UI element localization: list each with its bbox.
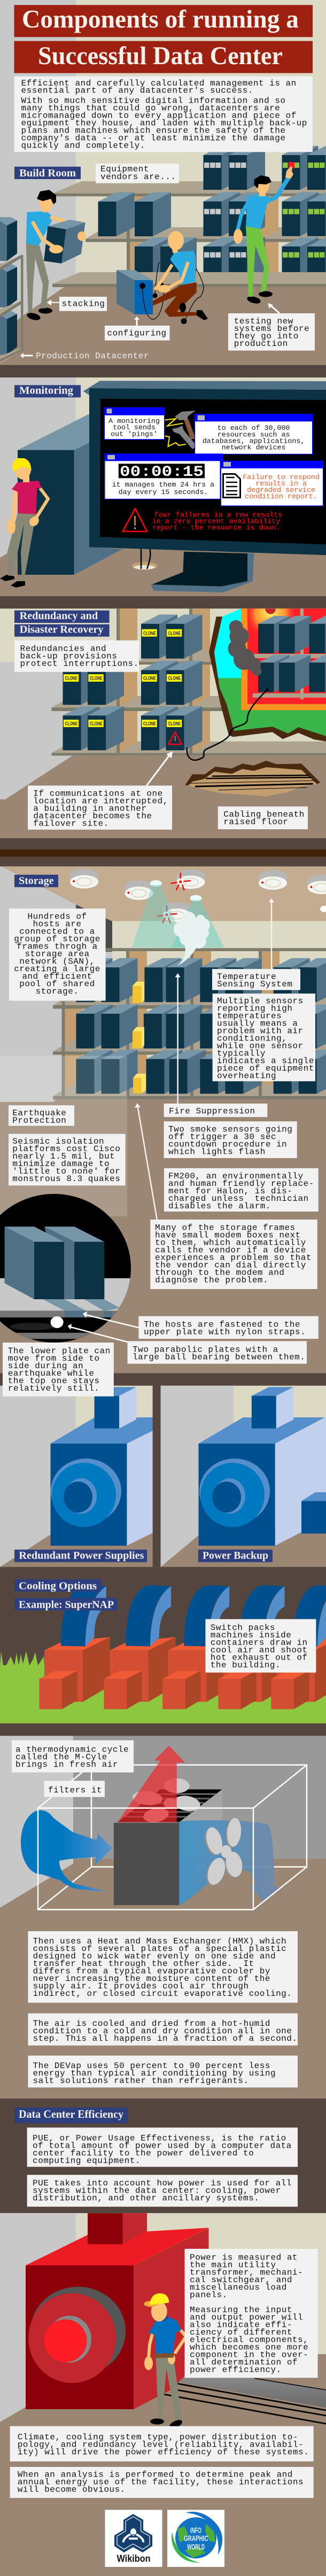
callout: modem boxes: have small modem boxes next [155,1231,301,1240]
text: redundancies: back-up provisions [20,651,117,661]
heading: data center efficiency: Data Center Efficiency [19,2108,123,2120]
text: smoke sensors [164,1121,297,1158]
text: hundreds of hosts: connected to a [19,927,95,936]
callout: nylon straps: upper plate with nylon straps. [144,1328,306,1337]
text: multiple sensors: problem with air [217,1027,304,1036]
text: smoke sensors: off trigger a 30 sec [168,1132,276,1142]
heading: example supernap: Example: SuperNAP [19,1599,114,1610]
callout: modem boxes: to them, which automatically [155,1238,306,1248]
text: power measured: transformer, mechani- [190,2268,303,2278]
text: redundancies: Redundancies and [20,644,106,653]
cable through wall [187,689,268,760]
text: lower plate: the top one stays [8,1376,100,1386]
exhaust arrow [118,1746,185,1822]
divider [153,1386,161,1567]
big server [18,413,123,575]
text: air cooled: The air is cooled and dried from a hot-humid [33,2019,270,2029]
window: failure report: degraded service [247,486,315,494]
window: monitoring tool: out 'pings' [111,430,158,438]
grass and ground [0,1651,326,1723]
heading: earthquake protection [9,1105,74,1126]
section background: build room [0,0,326,377]
text: multiple sensors: piece of equipment [217,1064,314,1074]
band [0,1723,326,1736]
clone labels: CLONE [168,721,181,727]
text: HMX [28,1931,298,2003]
text: air cooled: step. This all happens in a fraction of a second. [33,2034,297,2043]
floor: monitoring [0,547,326,596]
callout: configuring [105,317,170,341]
text: seismic isolation: platforms cost Cisco [12,1144,120,1154]
callout: parabolic plates: large ball bearing between them. [133,1352,305,1362]
text: PUE definition: PUE, or Power Usage Effectiveness, is the ratio [33,2133,286,2143]
callout: modem boxes: through to the modem and [155,1268,284,1278]
shelving: storage [53,948,326,1100]
text: hundreds of hosts: network (SAN), [19,957,95,966]
text: lower plate: earthquake while [8,1369,94,1378]
callout: fire suppression [164,973,267,1117]
callout: configuring: configuring [107,329,167,338]
text: multiple sensors: reporting high [217,1004,292,1014]
sprinklers and smoke cloud [132,880,326,966]
heading: cooling options: Cooling Options [19,1580,97,1592]
text: PUE definition [27,2127,298,2167]
text: seismic isolation [9,1134,125,1185]
heading: power backup: Power Backup [203,1550,268,1562]
clone labels: CLONE [65,721,77,727]
text: power measured: Power is measured at [190,2253,298,2263]
text: PUE scope: distribution, and other ancillary systems. [33,2193,259,2203]
warning [123,508,282,531]
section background: monitoring [0,377,326,597]
section background: redundancy [0,608,326,838]
text: DEVap: The DEVap uses 50 percent to 90 percent less [33,2061,270,2071]
intro text: micromanaged down to every application and piece of [21,111,297,121]
clone labels: CLONE [143,676,156,682]
callout: failover: datacenter becomes the [33,811,152,821]
text: climate: ity) will drive the power efficiency of these systems. [18,2448,309,2457]
panel: power backup [161,1386,326,1567]
text: hundreds of hosts: storage. [36,986,79,996]
callout: temperature sensing: Temperature [217,972,276,982]
text: FM200: FM200, an environmentally [168,1171,304,1181]
heading: redundancy: Redundancy and [20,610,98,622]
red generator [26,2213,208,2409]
text: analysis: will become obvious. [18,2485,126,2494]
text: hundreds of hosts: group of storage [14,934,100,944]
text: seismic isolation: minimize damage to [12,1159,110,1169]
window: timer [104,453,223,499]
text: lower plate: side during an [8,1361,83,1371]
text: FM200 [164,1168,319,1212]
logo: infographic world [167,2510,224,2567]
callout: thermodynamic cycle: a thermodynamic cycle [15,1745,129,1755]
shelving: redundancy [51,608,326,755]
window: resources: databases, applications, [203,437,305,445]
band [0,838,326,867]
text: analysis: When an analysis is performed to determine peak and [18,2470,293,2479]
text: HMX: differs from a typical evaporative cooler by [33,1966,270,1976]
text: lower plate: The lower plate can [8,1346,111,1356]
text: power measured: panels. [190,2290,228,2300]
callout: failover [28,751,173,830]
callout: parabolic plates: Two parabolic plates with a [133,1345,278,1354]
person: testing [234,166,293,305]
heading: monitoring: Monitoring [19,385,73,397]
intro text: equipment they house, and laden with multiple back-up [21,119,307,128]
person: configuring [117,231,208,324]
text: multiple sensors: temperatures [217,1012,282,1021]
floor: build room [0,287,326,365]
logo: infographic world: GRAPHIC [184,2534,208,2543]
title [14,5,313,73]
text: multiple sensors: overheating [217,1071,276,1081]
text: hundreds of hosts: pool of shared [19,979,95,989]
text: multiple sensors: conditioning, [217,1034,287,1044]
callout: failover: failover site. [33,819,109,828]
text: hundreds of hosts: hosts are [33,919,81,929]
heading: earthquake protection: Protection [12,1116,66,1125]
evaporative unit [114,1790,222,1905]
callout: testing: production [234,339,288,349]
text: PUE definition: center facility to the power delivered to [33,2148,254,2158]
window: failure report: Failure to respond [243,473,320,481]
text: multiple sensors: while one sensor [217,1042,304,1051]
callout: thermodynamic cycle: brings in fresh air [15,1760,118,1770]
callout: modem boxes: experiences a problem so that [155,1253,312,1263]
window: monitoring tool: A monitoring [108,417,160,425]
text: multiple sensors: usually means a [217,1019,298,1029]
text: switch packs: containers draw in [211,1638,308,1647]
production datacenter racks [0,217,24,364]
shelving: build room [52,146,326,287]
callout: modem boxes: diagnose the problem. [155,1276,268,1285]
text: power measured: ciency of different [190,2327,292,2337]
window: timer: day every 15 seconds. [119,488,208,496]
band [0,1373,326,1386]
window: failure report: condition report. [245,492,317,500]
text: power measured: cal switchgear, and [190,2276,292,2285]
window: resources: to each of 30,000 [218,424,290,432]
callout: testing: testing new [234,317,293,326]
text: PUE scope: systems within the data center: cooling, power [33,2186,281,2195]
person: engineer [144,2293,186,2430]
clone labels: CLONE [143,721,156,727]
text: PUE definition: computing equipment. [33,2156,141,2165]
text: redundancies [14,641,139,672]
text: power measured: component in the over- [190,2350,308,2359]
text: switch packs [205,1619,316,1672]
text: air cooled [28,2014,298,2046]
text: hundreds of hosts: and efficient [22,971,92,981]
wireframe front [38,1808,307,1910]
monitor stand [151,552,254,592]
intro text: plans and machines which ensure the safety of the [21,126,285,136]
warning: report - the resource is down. [152,524,280,531]
warning: four failures in a row results [154,511,282,519]
callout: modem boxes [135,1103,317,1289]
tools icon [164,411,197,449]
section background: efficiency [0,2099,326,2213]
intro text: Efficient and carefully calculated management is an [21,79,297,88]
text: seismic isolation: nearly 1.5 mil, but [12,1152,115,1161]
callout: cabling [218,806,308,829]
clone labels: CLONE [90,721,103,727]
floor hole with cables [131,548,157,570]
text: HMX: never increasing the moisture content of the [33,1974,270,1984]
text: power measured: all determination of [190,2358,298,2367]
text: switch packs: Switch packs [211,1623,275,1632]
intro text: essential part of any datacenter's success. [21,86,253,96]
text: multiple sensors: Multiple sensors [217,997,304,1006]
heading: earthquake protection: Earthquake [12,1108,66,1118]
text: multiple sensors: typically [217,1049,266,1059]
text: switch packs: machines inside [211,1630,291,1640]
text: lower plate [3,1343,114,1397]
text: HMX: indirect, or closed circuit evaporative cooling. [33,1989,292,1999]
clone labels [64,629,182,744]
intro text: With so much sensitive digital information and so [21,96,285,106]
callout: cabling: Cabling beneath [223,809,305,819]
text: power measured: Measuring the input [190,2305,292,2315]
text: switch packs: cool air and shoot [211,1645,308,1655]
clone labels: CLONE [168,676,181,682]
text: multiple sensors: indicates a single [217,1056,314,1066]
intro text [14,76,313,152]
text: hundreds of hosts [9,908,106,1001]
callout: modem boxes: calls the vendor if a device [155,1246,306,1255]
clone labels: CLONE [90,676,103,682]
floor: redundancy [0,755,326,838]
text: FM200: charged unless technician [168,1194,309,1204]
text: DEVap [28,2056,298,2087]
callout: failover: location are interrupted, [33,796,168,806]
callout: failover: If communications at one [33,789,163,798]
callout: thermodynamic cycle: called the M-Cyle [15,1753,107,1762]
text: seismic isolation: Seismic isolation [12,1137,104,1146]
callout: temperature sensing [212,898,300,990]
wall breach with fire scene [209,608,326,742]
heading: redundant power supplies: Redundant Power Supplies [19,1550,144,1562]
text: multiple sensors [213,993,315,1081]
text: power measured: miscellaneous load [190,2283,287,2293]
text: HMX: designed to wick water evenly on one side and [33,1952,276,1961]
callout: nylon straps: The hosts are fastened to the [144,1320,300,1330]
text: power measured: which becomes one more [190,2342,308,2352]
window: failure report [221,461,323,506]
logo: infographic world: INFO [190,2526,201,2535]
label: production datacenter: Production Datacenter [36,351,149,361]
inlet air flow [21,1810,112,1892]
text: power measured: and output power will [190,2312,303,2322]
band [0,596,326,608]
clone labels: CLONE [143,630,156,636]
callout: filters it [44,1781,105,1797]
callout: nylon straps [83,1312,319,1339]
intro text: many things that could go wrong, datacenters are [21,104,280,113]
window: timer: it manages them 24 hrs a [112,481,214,489]
light overlay [0,1056,127,1216]
text: hundreds of hosts: frames throgh a [17,942,98,951]
text: HMX: supply air. It provides cool air through [33,1981,249,1991]
text: redundancies: protect interruptions. [20,659,139,668]
title: Successful Data Center [38,42,283,70]
text: HMX: transfer heat through the other side. It [33,1959,254,1969]
text: DEVap: energy than typical air conditioning by using [33,2069,276,2078]
heading: storage: Storage [19,875,54,886]
containers and exhaust ducts [40,1585,326,1709]
callout: modem boxes: Many of the storage frames [155,1223,296,1233]
text: power measured: electrical components, [190,2335,308,2344]
floor: storage [0,1100,326,1373]
text: analysis [10,2467,314,2498]
callout: stacking: stacking [62,299,105,309]
callout: failover: a building in another [33,804,146,813]
logo: wikibon [105,2510,162,2567]
callout: fire suppression: Fire Suppression [169,1107,255,1116]
text: DEVap: salt solutions rather than refrigerants. [33,2076,249,2086]
text: power measured [185,2249,317,2378]
text: seismic isolation: monstrous 8.3 quakes [12,1174,120,1184]
smoke detectors [70,869,326,923]
callout: equipment vendors: vendors are... [100,172,176,182]
monitor [83,381,326,555]
callout: temperature sensing: Sensing System [217,980,292,989]
text: smoke sensors: countdown procedure in [168,1140,287,1150]
title: Components of running a [22,5,299,34]
text: hundreds of hosts: storage area [25,949,90,959]
window: monitoring tool [104,407,165,440]
person: stacking [26,190,86,321]
text: HMX: Then uses a Heat and Mass Exchanger (HMX) which [33,1937,286,1946]
text: lower plate: relatively still. [8,1384,100,1393]
text: PUE scope: PUE takes into account how power is used for all [33,2178,292,2188]
intro text: quickly and completely. [21,141,145,151]
heading: redundancy: Disaster Recovery [20,623,104,635]
callout: equipment vendors: Equipment [100,165,149,174]
modem boxes [133,982,146,1093]
text: air cooled: condition to a cold and dry condition all in one [33,2026,292,2036]
window: resources: resources such as [218,431,290,438]
warning: in a zero percent availability [152,518,280,525]
section background: cooling options [0,1567,326,1666]
text: climate: Climate, cooling system type, power distribution to- [18,2433,298,2442]
clone labels: CLONE [168,630,181,636]
text: FM200: disables the alarm. [168,1201,271,1211]
text: switch packs: hot exhaust out of [211,1653,308,1662]
band [0,365,326,377]
callout: modem boxes: the vendor can dial directly [155,1261,306,1270]
text: power measured: also indicate effi- [190,2320,292,2330]
text: lower plate: move from side to [8,1354,100,1363]
person: monitoring [0,458,48,588]
text: climate [10,2426,314,2462]
callout: parabolic plates [67,1324,307,1364]
logo: wikibon: Wikibon [117,2554,151,2564]
callout: cabling: raised floor [223,817,289,827]
callout: filters it: filters it [48,1786,102,1795]
text: HMX: consists of several plates of a special plastic [33,1944,286,1954]
text: hundreds of hosts: creating a large [14,964,100,974]
text: power measured: the main utility [190,2261,276,2270]
window: timer: 00:00:15 [120,464,204,481]
window: monitoring tool: tool sends [113,423,156,431]
text: switch packs: the building. [211,1660,281,1670]
raised floor opening [185,761,320,796]
text: FM200: and human friendly replace- [168,1179,314,1189]
heading: build room: Build Room [19,167,76,179]
section background: power [0,2213,326,2576]
text: smoke sensors: Two smoke sensors going [168,1125,292,1135]
detail circle: seismic isolation [0,1192,134,1345]
supply air flow [179,1820,281,1905]
window: resources: network devices [222,444,285,451]
wireframe back [38,1765,307,1910]
text: FM200: ment for Halon, is dis- [168,1186,292,1196]
callout: testing: they go into [234,331,299,341]
window: resources [195,414,313,454]
section background: m-cycle room [0,1736,326,2099]
section background: storage [0,867,326,1102]
window: failure report: results in a [255,480,307,488]
text: PUE definition: of total amount of power used by a computer data [33,2141,292,2150]
text: PUE scope [27,2175,298,2207]
panel: redundant power supplies [0,1386,153,1567]
heading: redundancy [14,610,110,637]
callout: stacking [48,297,107,311]
callout: equipment vendors [96,164,179,183]
callout: thermodynamic cycle [12,1740,134,1772]
text: smoke sensors: which lights flash [168,1147,266,1157]
callout: testing [228,303,315,351]
text: analysis: annual energy use of the facility, these interactions [18,2477,304,2487]
logo: infographic world: WORLD [187,2542,205,2551]
callout: testing: systems before [234,324,309,334]
text: climate: pology, and redundancy level (reliability, availabil- [18,2440,304,2450]
intro text: company's data -- or at least minimize the damage [21,134,285,143]
text: seismic isolation: 'little to none' for [12,1167,120,1176]
top fan [132,1778,201,1824]
clone labels: CLONE [65,676,77,682]
text: power measured: power efficiency. [190,2365,282,2375]
text: hundreds of hosts: Hundreds of [27,912,87,921]
right fan [202,1817,244,1888]
